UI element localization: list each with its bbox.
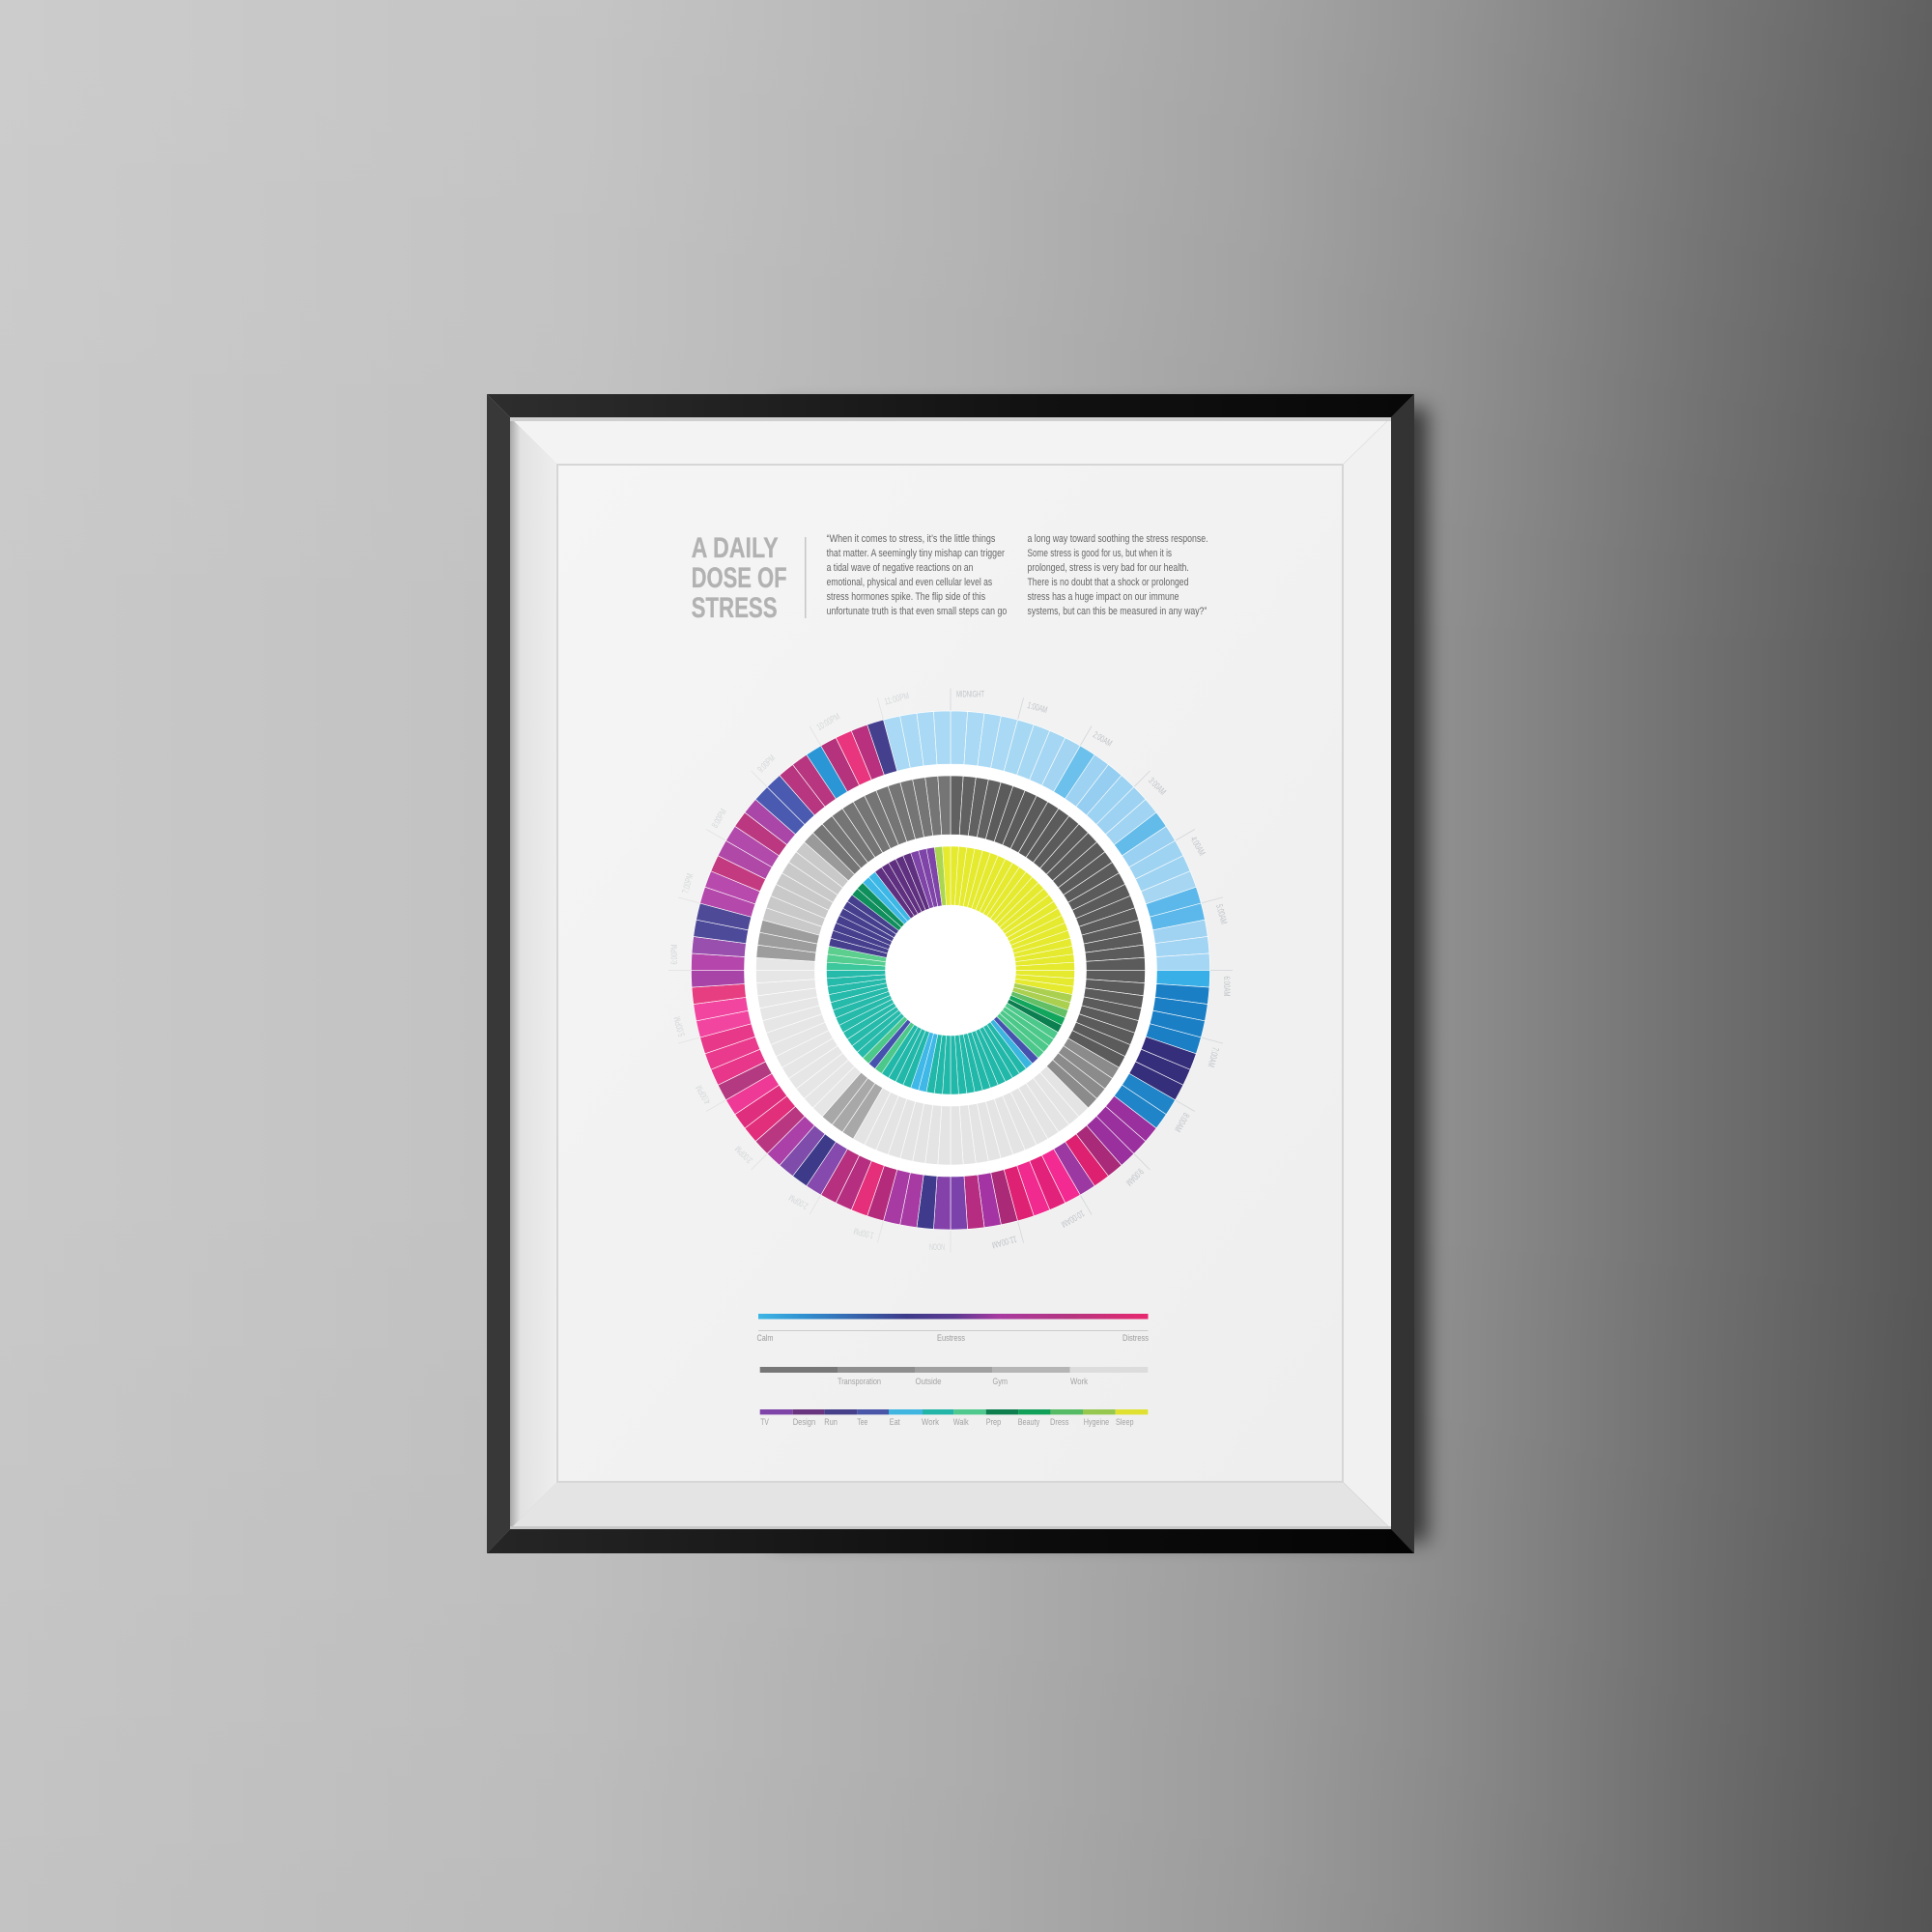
intro text: column 2: There is no doubt that a shock or prolonged [1028, 577, 1188, 588]
poster paper [557, 465, 1343, 1482]
legend: location [760, 1367, 1148, 1386]
intro text: column 1: unfortunate truth is that even small steps can go [827, 606, 1007, 617]
hour labels [669, 690, 1232, 1252]
hour labels: 3:00AM [1146, 776, 1168, 798]
legend: activity: Tee [857, 1416, 867, 1427]
intro text: column 2: systems, but can this be measured in any way?” [1028, 606, 1208, 617]
legend: activity [760, 1409, 1148, 1427]
hour labels: MIDNIGHT [956, 690, 984, 699]
legend: activity: TV [760, 1416, 769, 1427]
intro text: column 1: emotional, physical and even cellular level as [827, 577, 992, 588]
legend: activity: Dress [1050, 1416, 1069, 1427]
hour labels: NOON [929, 1240, 945, 1252]
mat board [510, 417, 1391, 1529]
hour labels: 5:00AM [1213, 903, 1229, 925]
legend: activity: Design [793, 1416, 815, 1427]
hour labels: 11:00AM [991, 1234, 1018, 1250]
hour labels: 1:00PM [853, 1225, 875, 1240]
hour labels: 6:00PM [669, 945, 680, 964]
intro text: column 1: a tidal wave of negative reactions on an [827, 562, 973, 574]
legend: activity: Eat [890, 1416, 900, 1427]
legend: activity: Hygeine [1084, 1416, 1109, 1427]
legend: activity: Beauty [1018, 1416, 1039, 1427]
legend: activity: Sleep [1116, 1416, 1134, 1427]
legend: stress scale: Calm [757, 1332, 774, 1343]
hour labels: 1:00AM [1026, 700, 1048, 716]
title: STRESS [692, 592, 778, 624]
intro text: column 2: a long way toward soothing the stress response. [1028, 533, 1208, 545]
intro text: column 1: stress hormones spike. The flip side of this [827, 591, 985, 603]
intro text: column 2: prolonged, stress is very bad for our health. [1028, 562, 1189, 574]
legend: stress scale: Eustress [937, 1332, 965, 1343]
hour labels: 8:00PM [710, 808, 729, 830]
inner ring: activity [826, 846, 1075, 1094]
hour labels: 4:00PM [694, 1083, 714, 1106]
hour labels: 2:00AM [1091, 729, 1114, 750]
legend: activity: Walk [953, 1416, 969, 1427]
hour labels: 9:00PM [755, 753, 778, 775]
hour labels: 10:00AM [1059, 1208, 1086, 1230]
hour labels: 4:00AM [1187, 835, 1208, 858]
legend: stress scale: Distress [1122, 1332, 1149, 1343]
hour labels: 7:00AM [1205, 1046, 1221, 1068]
hour labels: 9:00AM [1123, 1166, 1146, 1187]
intro text: column 2: Some stress is good for us, but when it is [1028, 548, 1172, 559]
title: DOSE OF [692, 562, 787, 594]
hour labels: 5:00PM [672, 1015, 688, 1037]
picture frame [487, 394, 1414, 1553]
hour labels: 10:00PM [815, 711, 842, 733]
legend: stress scale [757, 1314, 1149, 1343]
hour labels: 3:00PM [733, 1143, 755, 1165]
hour labels: 8:00AM [1172, 1111, 1191, 1133]
outer ring: stress level [691, 710, 1210, 1231]
legend: activity: Prep [986, 1416, 1001, 1427]
title: A DAILY [692, 532, 779, 564]
legend: location: Gym [993, 1376, 1008, 1386]
title divider [805, 537, 806, 618]
radial chart: daily stress clock [668, 688, 1233, 1252]
hour labels: 2:00PM [787, 1191, 810, 1211]
intro text: column 1: that matter. A seemingly tiny mishap can trigger [827, 548, 1005, 559]
legend: location: Transporation [838, 1376, 881, 1386]
hour labels: 7:00PM [680, 872, 696, 895]
title [692, 532, 787, 624]
intro text: column 2: stress has a huge impact on our immune [1028, 591, 1179, 603]
intro text: column 1 [827, 533, 1007, 617]
white chart disc [744, 764, 1157, 1177]
intro text: column 2 [1028, 533, 1208, 617]
hour tick marks [668, 688, 1233, 1252]
hour labels: 11:00PM [883, 691, 910, 707]
hour labels: 6:00AM [1221, 976, 1232, 997]
legend: location: Work [1070, 1376, 1088, 1386]
legend: location: Outside [916, 1376, 941, 1386]
intro text: column 1: “When it comes to stress, it’s the little things [827, 533, 995, 545]
middle ring: location [755, 776, 1146, 1165]
legend: activity: Work [922, 1416, 939, 1427]
frame shadow on wall [773, 408, 1428, 1542]
legend: activity: Run [824, 1416, 838, 1427]
